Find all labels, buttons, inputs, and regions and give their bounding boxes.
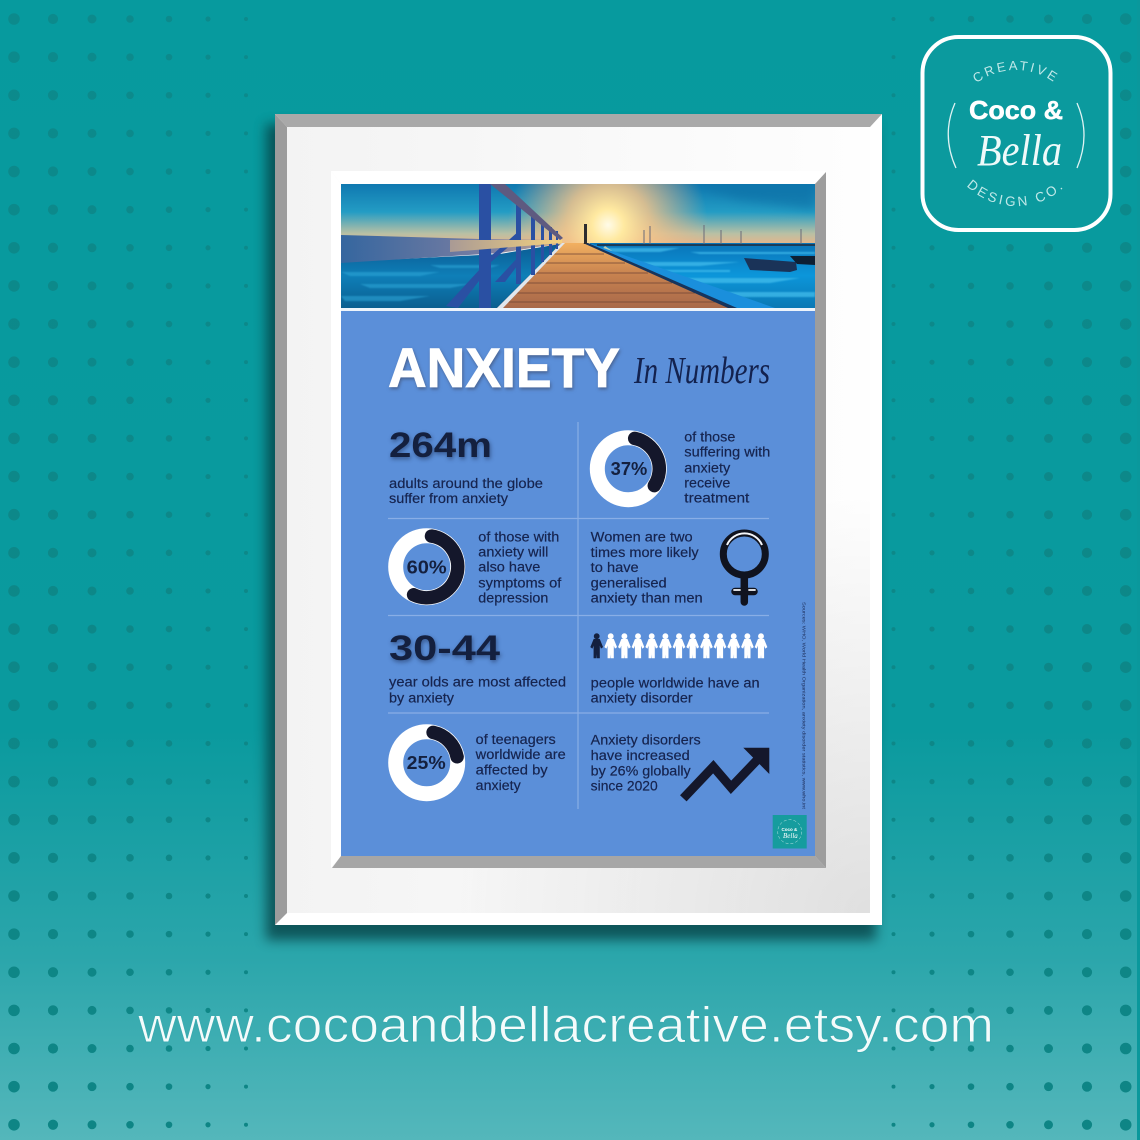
logo side brackets <box>948 103 1084 168</box>
text increase: Anxiety disorders <box>591 732 701 747</box>
text 60%: anxiety will <box>478 545 548 560</box>
stat: 264m <box>389 426 543 506</box>
text women <box>591 530 703 606</box>
text 25%: of teenagers <box>476 732 556 747</box>
text women: generalised <box>591 576 667 591</box>
stat: women <box>591 530 765 606</box>
mat inner bevel <box>331 171 826 868</box>
frame moulding <box>275 114 882 925</box>
text 60%: of those with <box>478 530 559 545</box>
railing <box>446 184 558 308</box>
stat: increase 26% <box>591 732 769 798</box>
text increase: since 2020 <box>591 779 658 794</box>
stat: 30-44: year olds are most affected <box>389 675 566 690</box>
poster <box>341 184 815 856</box>
donut 25%: 25% <box>407 753 446 773</box>
small logo <box>773 815 807 848</box>
text 37%: treatment <box>684 491 750 506</box>
stat: 264m: adults around the globe <box>389 476 543 491</box>
stat: 264m: suffer from anxiety <box>389 491 508 506</box>
picture frame <box>266 114 882 940</box>
text 25% <box>475 732 566 793</box>
boats <box>744 258 797 272</box>
text increase: by 26% globally <box>591 764 691 779</box>
text 60%: symptoms of <box>478 576 562 591</box>
stat: 30-44 <box>389 629 566 705</box>
donut 25% <box>396 732 458 794</box>
website url: www.cocoandbellacreative.etsy.com <box>137 997 994 1053</box>
text women: to have <box>591 560 639 575</box>
right sea <box>590 243 815 308</box>
stat: 30-44: by anxiety <box>389 690 454 705</box>
text 25%: worldwide are <box>475 747 566 762</box>
donut 60%: 60% <box>407 557 447 577</box>
left sea <box>341 244 560 308</box>
stat: 264m: 264m <box>389 426 492 465</box>
text women: anxiety than men <box>591 591 703 606</box>
stat: people worldwide <box>591 634 767 706</box>
text 37% <box>684 430 770 506</box>
mat board <box>287 127 870 913</box>
text increase <box>591 732 701 794</box>
icon: female symbol <box>723 533 765 602</box>
donut 37% <box>597 438 659 500</box>
poster blue panel <box>341 308 815 856</box>
donut 60% <box>396 536 458 598</box>
stat: 30-44: 30-44 <box>389 629 501 668</box>
text people: anxiety disorder <box>591 691 693 706</box>
title: anxiety: ANXIETY <box>388 336 620 399</box>
logo text: coco and: Coco & <box>969 95 1063 125</box>
text people: people worldwide have an <box>591 675 760 690</box>
text women: Women are two <box>591 530 693 545</box>
logo text: creative: CREATIVE <box>974 61 1058 82</box>
logo text: bella: Bella <box>977 126 1062 175</box>
text 25%: affected by <box>476 763 548 778</box>
text 37%: receive <box>684 476 730 491</box>
text 60%: also have <box>478 560 540 575</box>
text people <box>591 675 760 706</box>
small logo: Bella <box>783 832 798 840</box>
boardwalk <box>497 243 740 308</box>
source note: Sources: WHO, World Health Organization, anxiety disorder statistics, www.who.int <box>800 602 806 810</box>
text women: times more likely <box>591 545 699 560</box>
text 25%: anxiety <box>476 778 521 793</box>
distant masts <box>644 225 801 244</box>
text 37%: suffering with <box>684 445 770 460</box>
text 60%: depression <box>478 591 548 606</box>
sea wall <box>341 235 562 263</box>
donut 37%: 37% <box>611 459 647 479</box>
lamp post <box>584 224 587 244</box>
stat: 37% treatment <box>597 430 770 506</box>
stat: 25% teenagers <box>396 732 566 794</box>
logo text: design co: DESIGN CO. <box>967 180 1062 206</box>
text 37%: of those <box>684 430 735 445</box>
photo: jetty at sunset <box>341 184 815 308</box>
logo badge: Coco & Bella <box>920 35 1112 232</box>
icon: rising arrow <box>683 748 769 798</box>
small logo: Coco & <box>782 827 798 832</box>
text increase: have increased <box>591 748 690 763</box>
stat: 60% depression <box>396 530 562 606</box>
icon: row of people <box>591 634 767 658</box>
frame shadow <box>266 124 876 940</box>
grid dividers <box>388 422 769 809</box>
subtitle: in numbers: In Numbers <box>633 350 770 392</box>
jetty edge <box>584 243 775 308</box>
text 37%: anxiety <box>684 460 731 475</box>
text 60% <box>478 530 562 606</box>
